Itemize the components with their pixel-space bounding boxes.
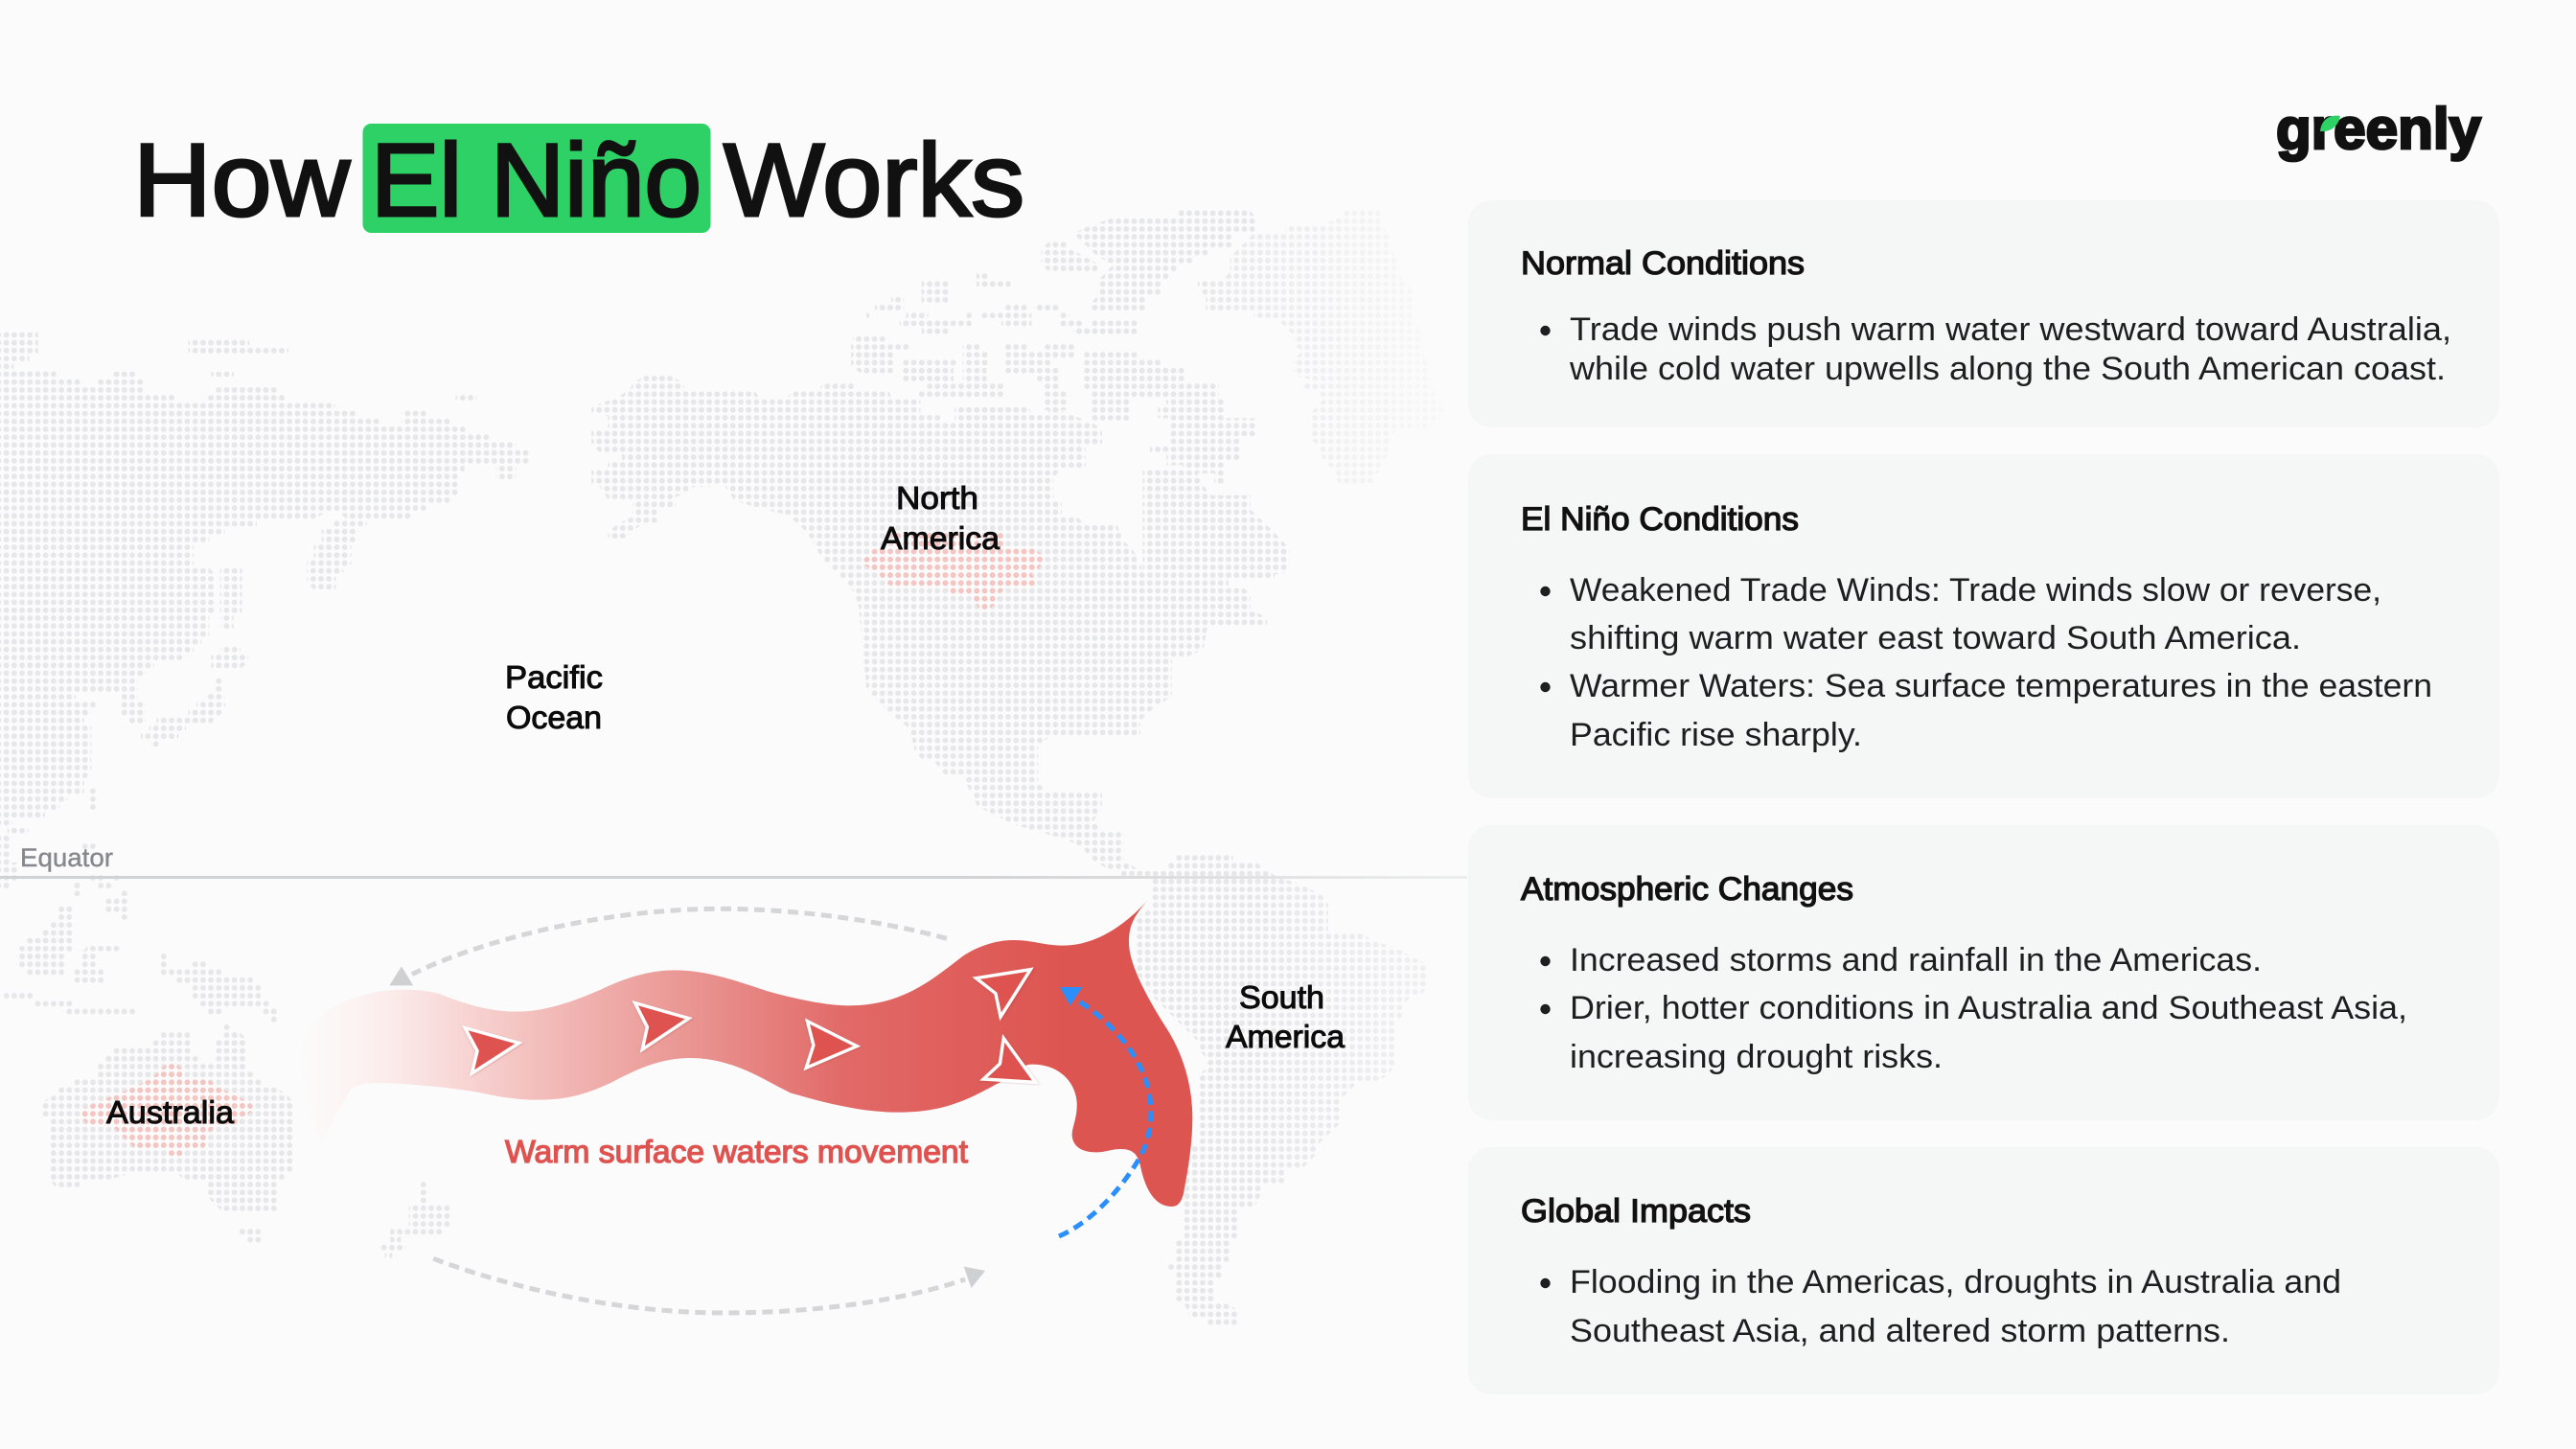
flow arrow 5 xyxy=(983,1038,1035,1082)
label: South America xyxy=(1226,979,1346,1054)
bullet text xyxy=(1540,572,2432,753)
bullet text: Pacific rise sharply. xyxy=(1570,717,1862,753)
bullet text: while cold water upwells along the South American coast. xyxy=(1569,351,2446,387)
map: Australia heat dots xyxy=(82,1064,253,1156)
panel: global impacts xyxy=(1468,1147,2499,1394)
bullet text: Southeast Asia, and altered storm patterns. xyxy=(1570,1313,2230,1349)
label: South America: America xyxy=(1226,1019,1346,1054)
gray circulation arrow: upper xyxy=(389,908,947,985)
map: North America dots xyxy=(591,211,1289,869)
label: North America: America xyxy=(881,520,1000,556)
blue arrow head xyxy=(1060,987,1082,1005)
bullet text: increasing drought risks. xyxy=(1570,1039,1943,1075)
map: South America dots xyxy=(1121,855,1426,1324)
lower arrow head xyxy=(964,1267,985,1288)
heading: normal conditions: Normal Conditions xyxy=(1521,245,1805,282)
title text: How: How xyxy=(133,122,351,238)
flow arrow 1 xyxy=(465,1028,518,1073)
bullet text: Warmer Waters: Sea surface temperatures in the eastern xyxy=(1570,668,2432,704)
bullet text: shifting warm water east toward South America. xyxy=(1570,620,2301,656)
label: Pacific Ocean: Pacific xyxy=(505,659,603,695)
label: Australia: Australia xyxy=(106,1094,235,1130)
heading: el nino conditions: El Niño Conditions xyxy=(1521,501,1799,538)
map: Greenland dots fading right xyxy=(1198,211,1369,483)
bullet text: Trade winds push warm water westward toward Australia, xyxy=(1570,311,2451,348)
title highlight xyxy=(362,124,711,233)
heading: global impacts: Global Impacts xyxy=(1521,1193,1751,1230)
panel: el nino conditions xyxy=(1468,454,2499,798)
label: Pacific Ocean: Ocean xyxy=(506,700,602,735)
bullet text: Weakened Trade Winds: Trade winds slow or reverse, xyxy=(1570,572,2381,609)
equator line xyxy=(0,876,1467,879)
label: North America xyxy=(881,480,1000,556)
bullet text: Flooding in the Americas, droughts in Australia and xyxy=(1570,1264,2341,1300)
heading: atmospheric changes: Atmospheric Changes xyxy=(1521,871,1853,908)
panel: normal conditions xyxy=(1468,200,2499,427)
upper arrow head xyxy=(389,966,413,985)
bullet text: Increased storms and rainfall in the Americas. xyxy=(1570,942,2262,978)
map: Asia and Oceania dots xyxy=(0,332,529,1258)
panel: atmospheric changes xyxy=(1468,825,2499,1120)
blue cold current arrow xyxy=(1059,987,1151,1236)
gray circulation arrow: lower xyxy=(433,1258,985,1313)
label: Pacific Ocean xyxy=(505,659,603,735)
bullet text xyxy=(1540,942,2407,1075)
bullet text xyxy=(1540,1264,2341,1349)
bullet text xyxy=(1540,311,2451,387)
flow arrow 3 xyxy=(806,1022,857,1068)
title text: El Niño: El Niño xyxy=(371,122,702,238)
title text: Works: Works xyxy=(724,122,1024,238)
logo: greenly: greenly xyxy=(2276,97,2482,161)
flow arrow 2 xyxy=(635,1003,689,1049)
label: South America: South xyxy=(1239,979,1324,1015)
map: North America heat dots xyxy=(864,533,1043,610)
bullet text: Drier, hotter conditions in Australia and Southeast Asia, xyxy=(1570,990,2407,1026)
label: North America: North xyxy=(896,480,978,516)
dotted world map xyxy=(0,190,1486,1346)
equator label: Equator xyxy=(20,843,113,872)
warm water plume xyxy=(301,899,1192,1207)
flow arrow 4 xyxy=(977,970,1030,1017)
icon: logo leaf xyxy=(2320,116,2340,131)
title xyxy=(133,122,1024,238)
label: warm surface waters: Warm surface waters movement xyxy=(505,1134,968,1169)
